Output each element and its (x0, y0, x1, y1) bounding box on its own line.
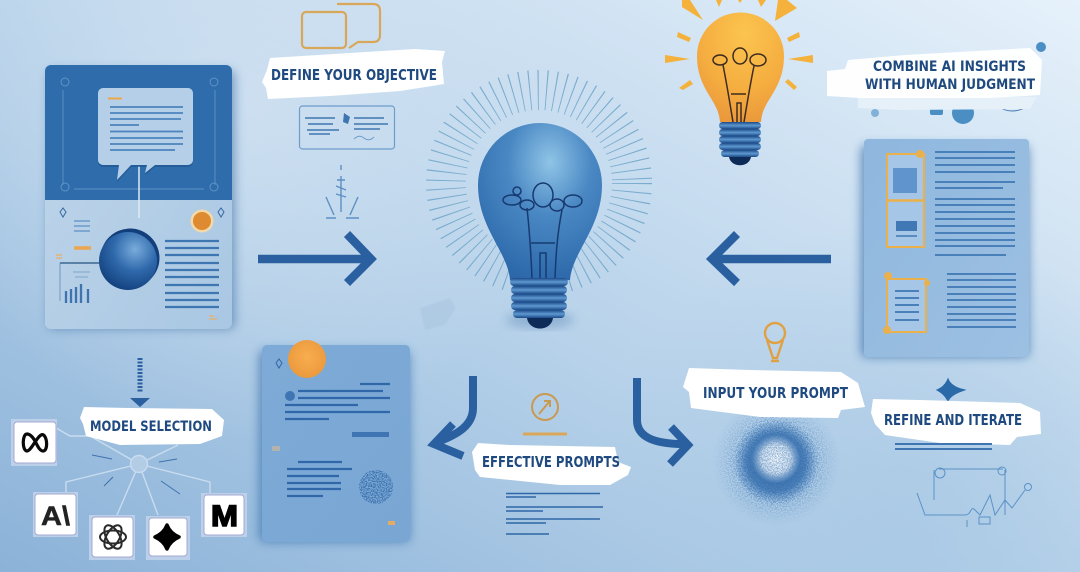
orange light bulb (665, 0, 813, 165)
icon: target circle with bar (523, 394, 567, 434)
label: input your prompt (683, 368, 865, 418)
label: combine AI insights with human judgment: WITH HUMAN JUDGMENT (865, 77, 1035, 93)
logo: M (201, 493, 247, 537)
icon: blue diamond star (938, 380, 963, 400)
text lines (285, 384, 390, 496)
speech bubble with text lines (98, 88, 193, 182)
arrow: left to bulb (712, 234, 831, 283)
icon: small note box (300, 106, 394, 149)
panel: lower document card (259, 340, 410, 542)
label: combine AI insights with human judgment (827, 48, 1042, 110)
effective prompts text block (506, 494, 603, 534)
label: input your prompt: INPUT YOUR PROMPT (703, 384, 849, 402)
sun rays (665, 0, 813, 90)
text lines (935, 152, 1016, 327)
logo: M: M (211, 500, 238, 533)
label: refine and iterate: REFINE AND ITERATE (884, 411, 1022, 429)
refine lines and sketch chart (895, 444, 1032, 527)
screw base (510, 278, 568, 328)
orange coin (190, 210, 214, 232)
label: model selection (80, 407, 224, 445)
radiating lines (446, 90, 632, 276)
curved arrow: down right (637, 378, 688, 464)
screw base (719, 122, 761, 165)
logo: anthropic: A\ (41, 501, 71, 531)
logo: openai (89, 515, 135, 560)
filament (503, 183, 582, 278)
faint smudge (420, 298, 456, 330)
text lines and mini chart (56, 208, 224, 319)
sphere (99, 228, 160, 290)
model selection connector diagram (56, 428, 210, 515)
decorative dots near combine label (871, 42, 1046, 124)
icon: location bulb pin (765, 323, 785, 361)
noise sphere (712, 398, 840, 526)
logo: anthropic (33, 492, 78, 537)
arrow dotted down (130, 358, 150, 407)
label: model selection: MODEL SELECTION (90, 419, 212, 435)
central blue light bulb (446, 90, 632, 328)
label: effective prompts: EFFECTIVE PROMPTS (482, 453, 620, 471)
panel: left document card (45, 65, 235, 329)
logo: diamond (146, 516, 190, 560)
panel: right document card (861, 139, 1029, 357)
icon: speech bubbles (302, 4, 380, 48)
label: refine and iterate (871, 399, 1041, 445)
curved arrow: down left (434, 376, 473, 456)
icon: figure symbol (326, 165, 359, 218)
arrow: right to bulb (258, 234, 371, 283)
filament (713, 48, 766, 122)
logo: meta (11, 419, 57, 466)
label: effective prompts (472, 443, 631, 485)
label: define your objective (262, 49, 445, 99)
framed images (883, 150, 930, 334)
orange coin (288, 340, 326, 378)
label: define your objective: DEFINE YOUR OBJECTIVE (271, 66, 437, 84)
label: combine AI insights with human judgment: COMBINE AI INSIGHTS (873, 59, 1026, 75)
